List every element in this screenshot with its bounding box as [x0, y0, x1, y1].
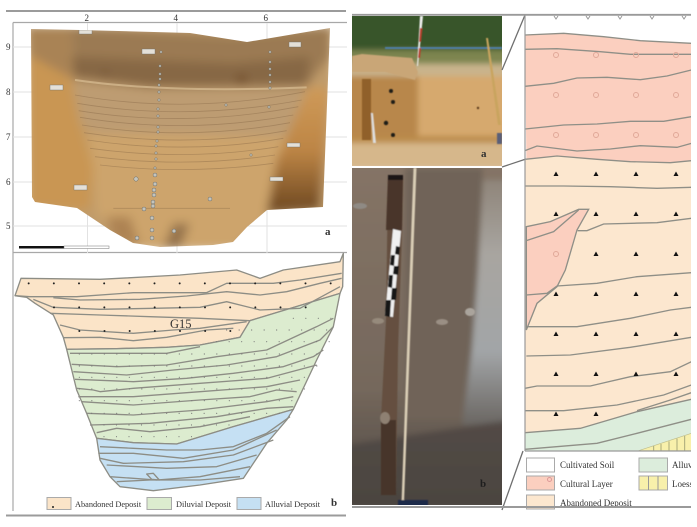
triangle markers [554, 172, 678, 416]
axis labels: 8 [6, 87, 11, 97]
panel a frame and grid [6, 10, 347, 511]
axis labels: 4 [174, 13, 178, 23]
tag labels on the wall [50, 30, 301, 190]
cultural layer [525, 33, 691, 163]
axis labels: 7 [6, 132, 11, 142]
legend right: Cultivated Soil [560, 460, 615, 470]
photo b: trench close-up: b [480, 478, 486, 490]
circle markers [554, 52, 678, 256]
alluvial layer [525, 397, 697, 451]
legend right: Cultural Layer [560, 479, 613, 489]
right frame lines [352, 15, 691, 507]
connector lines [502, 15, 526, 510]
deposit symbols [29, 283, 333, 437]
legend b: Alluvial Deposit [265, 500, 321, 509]
stratigraphic lines [15, 273, 342, 482]
legend right [526, 458, 697, 509]
axis labels: 5 [6, 221, 11, 231]
right section drawing [525, 16, 697, 509]
scale bar [19, 246, 109, 248]
panel label a: a [325, 226, 331, 238]
cultural wedge [526, 209, 589, 330]
top tick marks [554, 16, 686, 19]
photo a: trench overview [352, 16, 502, 166]
abandoned deposit [525, 156, 697, 433]
axis labels [6, 13, 268, 231]
abandoned deposit layer [15, 253, 343, 349]
legend right: Abandoned Deposit [560, 498, 632, 508]
loess layer [639, 433, 697, 451]
photo: section wall a [25, 25, 335, 250]
photo b: trench close-up [352, 168, 502, 505]
alluvial deposit layer [97, 409, 293, 491]
axis labels: 2 [84, 13, 89, 23]
legend right: Loess [672, 479, 693, 489]
legend b: Abandoned Deposit [75, 500, 142, 509]
photo a: trench overview: a [481, 148, 487, 160]
legend b: Diluvial Deposit [176, 500, 232, 509]
markers on the wall [134, 51, 271, 240]
axis labels: 6 [264, 13, 268, 23]
label G15: G15 [170, 317, 192, 331]
axis labels: 9 [6, 42, 11, 52]
legend b [47, 498, 321, 510]
diluvial deposit layer [67, 293, 340, 444]
panel label b: b [331, 497, 337, 509]
section drawing b [15, 253, 343, 491]
bottom rule left [6, 514, 346, 516]
axis labels: 6 [6, 177, 11, 187]
